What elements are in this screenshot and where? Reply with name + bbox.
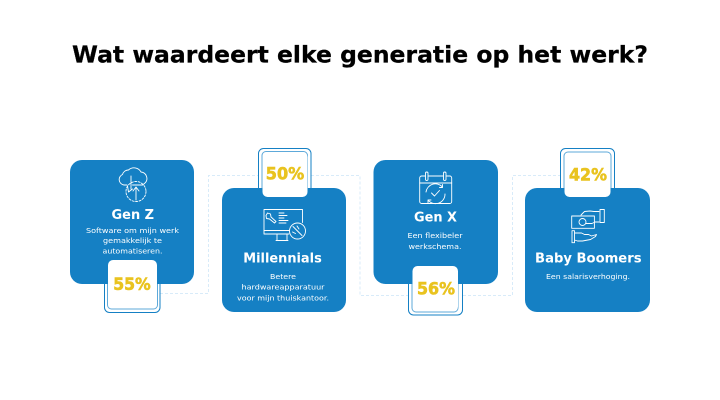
badge outline: 42% (560, 148, 614, 198)
icon: calendar with check (420, 172, 452, 204)
badge: 42% (564, 152, 610, 197)
badge outline: 55% (104, 270, 160, 312)
badge: 56%: 56% (417, 280, 455, 298)
badge: 55% (108, 260, 157, 308)
heading: Gen Z: Gen Z (112, 208, 154, 223)
badge: 55%: 55% (113, 275, 151, 294)
card: Gen X (374, 160, 498, 284)
badge outline: 50% (258, 148, 311, 198)
badge: 50% (262, 152, 308, 197)
badge: 56% (412, 266, 458, 312)
badge outline: 56% (408, 270, 462, 315)
badge: 42%: 42% (569, 166, 607, 185)
badge: 50%: 50% (266, 164, 305, 184)
heading: Millennials: Millennials (243, 252, 322, 267)
card: Millennials (222, 188, 346, 312)
card: Baby Boomers (525, 188, 650, 312)
description: Gen Z: Software om mijn werk (86, 227, 180, 235)
icon: monitor with wrench (264, 210, 306, 240)
description: Millennials: Betere (270, 273, 296, 281)
icon: cloud with arrows (119, 168, 147, 202)
title: Wat waardeert elke generatie op het werk? (72, 42, 648, 68)
description: Gen Z: automatiseren. (102, 248, 162, 256)
card: Gen Z (70, 160, 194, 284)
heading: Baby Boomers: Baby Boomers (535, 252, 642, 267)
icon: hand giving money (572, 210, 604, 243)
description: Millennials: voor mijn thuiskantoor. (237, 294, 329, 302)
description: Gen Z: gemakkelijk te (103, 237, 162, 245)
description: Millennials: hardwareapparatuur (242, 284, 325, 292)
description: Gen X: Een flexibeler (408, 232, 463, 240)
description: Baby Boomers: Een salarisverhoging. (546, 273, 630, 281)
description: Gen X: werkschema. (408, 243, 462, 251)
heading: Gen X: Gen X (414, 211, 457, 226)
